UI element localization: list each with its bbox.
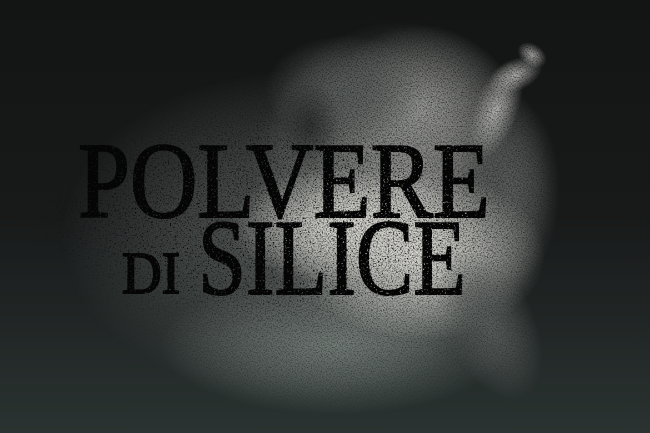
dust cloud (60, 20, 565, 417)
title word: DI: DI (122, 240, 180, 306)
title word: SILICE: SILICE (198, 199, 466, 318)
title: POLVERE DI SILICE (78, 122, 490, 318)
title line 1: POLVERE (78, 122, 490, 241)
dark speckle around title (68, 112, 536, 332)
dust plume: upper-right wisp (458, 37, 551, 166)
